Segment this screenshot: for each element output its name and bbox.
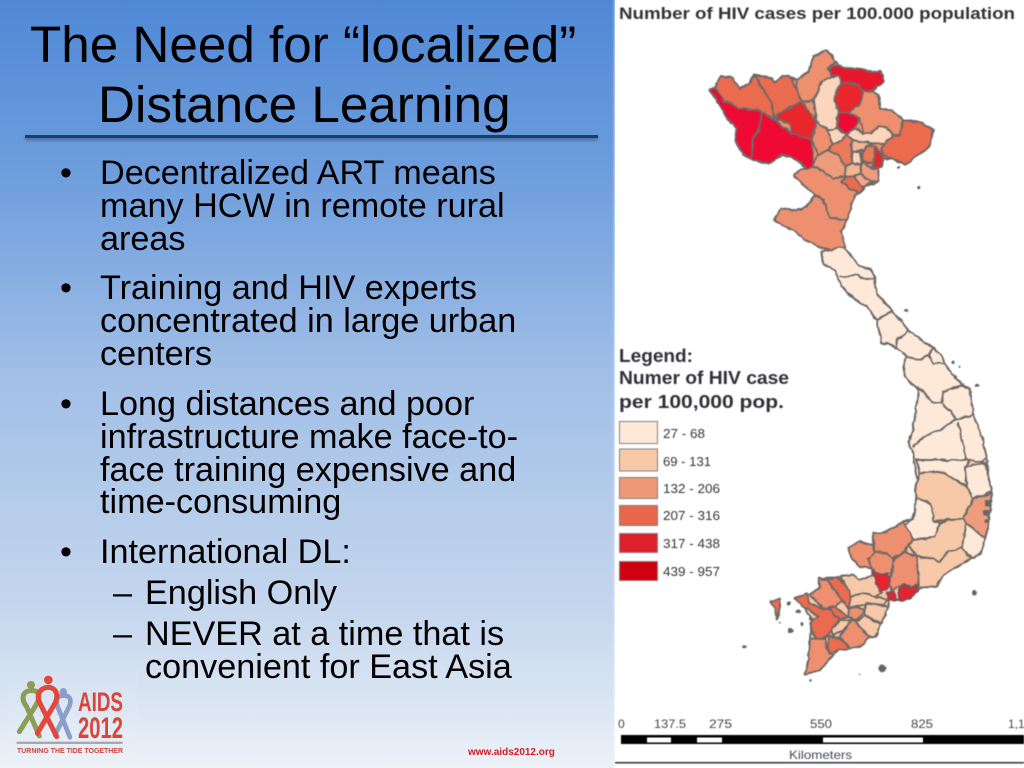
bullet 1: • xyxy=(60,154,72,192)
bullet 4 with sub-items: • xyxy=(60,533,72,571)
bullet 2: Training and HIV experts xyxy=(100,269,477,307)
footer url: www.aids2012.org xyxy=(468,747,555,758)
legend heading: Legend: xyxy=(619,346,693,366)
bullet 3: face training expensive and xyxy=(100,451,516,489)
legend labels: 132 - 206 xyxy=(663,481,720,496)
scale bar: 137.5 xyxy=(654,717,686,731)
legend labels: 439 - 957 xyxy=(663,564,720,579)
bullet 2: concentrated in large urban xyxy=(100,302,516,340)
bullet 3: time-consuming xyxy=(100,483,341,521)
map: southern Vietnam xyxy=(743,460,992,681)
bullet list xyxy=(60,154,518,686)
logo: AIDS 2012: TURNING THE TIDE TOGETHER xyxy=(17,748,123,755)
bullet 3: • xyxy=(60,385,72,423)
title: Distance Learning xyxy=(98,76,511,133)
legend swatches xyxy=(620,422,658,580)
bullet 1 xyxy=(60,154,505,258)
scale bar: 275 xyxy=(709,717,732,731)
map: northern Vietnam xyxy=(710,50,933,250)
scale bar: Kilometers xyxy=(789,748,852,762)
bullet 2: • xyxy=(60,269,72,307)
scale bar: 825 xyxy=(911,717,933,731)
bullet 4 with sub-items: – xyxy=(113,615,132,653)
bullet 2: centers xyxy=(100,335,212,373)
scale bar: 0 xyxy=(618,717,625,731)
title underline xyxy=(25,135,598,138)
bullet 4 with sub-items: English Only xyxy=(145,574,337,612)
scale bar xyxy=(615,717,1024,764)
legend heading: per 100,000 pop. xyxy=(619,392,784,412)
logo: AIDS 2012 xyxy=(16,676,123,755)
bullet 3: Long distances and poor xyxy=(100,385,474,423)
bullet 4 with sub-items: convenient for East Asia xyxy=(145,648,512,686)
map: central Vietnam xyxy=(821,247,989,480)
legend xyxy=(619,346,789,580)
legend labels xyxy=(663,426,720,579)
legend labels: 317 - 438 xyxy=(663,536,720,551)
bullet 1: Decentralized ART means xyxy=(100,154,496,192)
title: The Need for “localized” xyxy=(30,16,576,73)
bullet 4 with sub-items: – xyxy=(113,574,132,612)
title xyxy=(30,16,576,133)
legend labels: 207 - 316 xyxy=(663,508,720,523)
map title: Number of HIV cases per 100.000 population xyxy=(619,5,1015,23)
bullet 4 with sub-items: NEVER at a time that is xyxy=(145,615,504,653)
bullet 1: many HCW in remote rural xyxy=(100,187,505,225)
bullet 2 xyxy=(60,269,516,373)
scale bar: 550 xyxy=(810,717,832,731)
bullet 1: areas xyxy=(100,220,186,258)
legend heading: Numer of HIV case xyxy=(619,368,789,388)
bullet 3: infrastructure make face-to- xyxy=(100,418,518,456)
legend labels: 27 - 68 xyxy=(663,426,705,441)
map panel xyxy=(615,0,1024,768)
bullet 4 with sub-items xyxy=(60,533,512,686)
legend labels: 69 - 131 xyxy=(663,454,711,469)
bullet 4 with sub-items: International DL: xyxy=(100,533,351,571)
bullet 3 xyxy=(60,385,518,521)
choropleth map of Vietnam xyxy=(710,50,992,681)
legend heading xyxy=(619,346,789,412)
